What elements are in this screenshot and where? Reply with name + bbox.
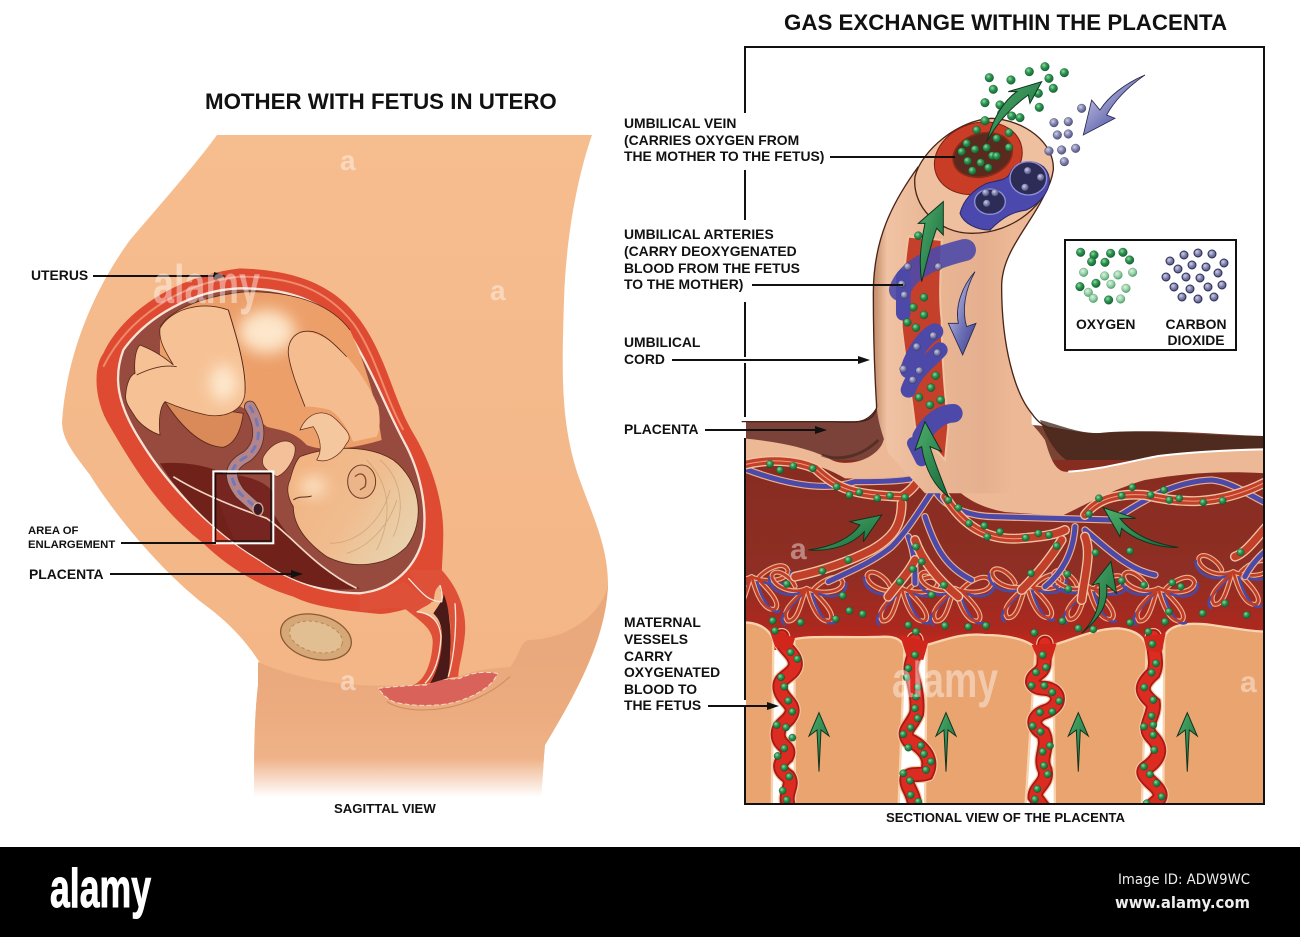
- arrow: curved green left: [808, 515, 882, 550]
- inner white lines: [408, 578, 456, 683]
- watermark letters on panel: a: [790, 533, 807, 566]
- label: umbilical arteries: BLOOD FROM THE FETUS: [624, 260, 800, 276]
- label: maternal vessels: [624, 614, 779, 713]
- labels: right panel: [624, 115, 1125, 825]
- fetus leg and foot: [126, 306, 245, 435]
- lower pelvis outer skin: [254, 585, 608, 797]
- arrows: straight green: [809, 713, 1197, 772]
- cervical wall: [410, 570, 465, 678]
- watermark letters on panel: alamy: [892, 652, 998, 708]
- fetus torso: [160, 292, 382, 449]
- label: uterus: UTERUS: [31, 267, 88, 283]
- umbilical vein cross section: [924, 110, 1033, 207]
- watermark letters on panel: [790, 533, 1257, 708]
- footer url: www.alamy.com: [1115, 893, 1250, 912]
- panel: sagittal view of mother: [62, 135, 608, 797]
- fetus arm: [288, 331, 380, 442]
- maternal spiral vessels: [778, 637, 1160, 810]
- fetal veins (blue): [743, 468, 1267, 587]
- umbilical arteries cross section: [960, 162, 1049, 230]
- label: uterus: [31, 267, 226, 283]
- area of enlargement box: [213, 471, 273, 543]
- title: mother with fetus: MOTHER WITH FETUS IN UTERO: [205, 89, 557, 114]
- label: umbilical vein: THE MOTHER TO THE FETUS): [624, 148, 824, 164]
- legend: oxygen label: OXYGEN: [1076, 316, 1135, 332]
- footer band: [0, 847, 1300, 937]
- dots in cross section: [958, 126, 1044, 207]
- legend: carbon dioxide dots: [1162, 249, 1228, 303]
- vaginal lining: [378, 672, 497, 705]
- umbilical cord: [742, 62, 1145, 497]
- arrow: cord base up: [915, 422, 948, 497]
- lower uterine wall: [359, 582, 442, 685]
- label: umbilical arteries: UMBILICAL ARTERIES: [624, 226, 774, 242]
- label: umbilical cord: [624, 334, 870, 367]
- label: umbilical arteries: (CARRY DEOXYGENATED: [624, 243, 797, 259]
- label: umbilical vein: [624, 115, 955, 164]
- cord end disc: [915, 118, 1053, 233]
- amniotic cavity: [118, 288, 424, 593]
- dots along cord: [898, 232, 945, 409]
- maternal tissue blocks: [742, 623, 1268, 813]
- cord stump: [253, 503, 263, 516]
- label: placenta: PLACENTA: [29, 566, 104, 582]
- uterus: [97, 268, 443, 614]
- fetus hand on face: [300, 413, 349, 461]
- label: maternal vessels: BLOOD TO: [624, 681, 697, 697]
- label: area of enlargement: [28, 525, 216, 551]
- label: maternal vessels: OXYGENATED: [624, 664, 720, 680]
- vessel funnels: [768, 627, 1166, 660]
- bladder: [276, 607, 356, 667]
- legend: oxygen dots: [1076, 248, 1137, 304]
- labels: left panel: [28, 267, 436, 816]
- label: area of enlargement: AREA OF: [28, 525, 79, 537]
- footer image id: Image ID: ADW9WC: [1118, 872, 1250, 888]
- fetal arteries (red): [743, 447, 1267, 600]
- placenta maroon tissue: [743, 460, 1267, 650]
- cord body: [873, 167, 1052, 493]
- label: area of enlargement: ENLARGEMENT: [28, 539, 115, 551]
- legend: carbon dioxide label: DIOXIDE: [1167, 332, 1225, 348]
- fetus head: [288, 448, 418, 565]
- arrow: oxygen leaving: [987, 82, 1042, 142]
- watermark: left panel: a: [340, 665, 356, 696]
- footer logo: alamy: [50, 857, 151, 919]
- umbilical vein in cord: [902, 237, 948, 460]
- oxygen released: [981, 62, 1069, 125]
- caption: sagittal view: SAGITTAL VIEW: [334, 801, 436, 816]
- label: placenta: [29, 566, 303, 582]
- villus tufts: [714, 555, 1273, 625]
- label: umbilical vein: UMBILICAL VEIN: [624, 115, 736, 131]
- peach chorionic membrane: [743, 405, 1267, 516]
- arrow: down the cord: [948, 272, 976, 355]
- label: umbilical cord: CORD: [624, 351, 665, 367]
- label: maternal vessels: CARRY: [624, 648, 674, 664]
- oxygen dots in placenta: [766, 460, 1250, 807]
- watermark: left panel: [153, 145, 506, 696]
- ear: [348, 465, 376, 498]
- watermark: left panel: a: [340, 145, 356, 176]
- label: placenta: [624, 421, 827, 437]
- label: umbilical arteries: [624, 226, 903, 292]
- arrow: carbon dioxide entering: [1083, 75, 1145, 135]
- placenta membrane: [173, 477, 357, 588]
- legend: carbon dioxide label: CARBON: [1166, 316, 1226, 332]
- arrow: curved green center: [1082, 562, 1117, 633]
- arrow: curved green right: [1103, 508, 1178, 547]
- panel: sectional view of placenta: [714, 62, 1273, 813]
- label: umbilical cord: UMBILICAL: [624, 334, 701, 350]
- label: maternal vessels: MATERNAL: [624, 614, 701, 630]
- label: placenta: PLACENTA: [624, 421, 699, 437]
- fetus hand at mouth: [262, 441, 295, 477]
- carbon dioxide entering: [1045, 104, 1086, 166]
- brown placenta surface left: [746, 408, 884, 460]
- umbilical cord small: [232, 407, 258, 510]
- body silhouette: [62, 135, 608, 797]
- watermark: left panel: alamy: [153, 253, 260, 315]
- watermark letters on panel: a: [1240, 666, 1257, 699]
- label: umbilical vein: (CARRIES OXYGEN FROM: [624, 132, 799, 148]
- umbilical arteries in cord: [900, 250, 965, 460]
- caption: sectional view: SECTIONAL VIEW OF THE PLACENTA: [886, 810, 1125, 825]
- title: gas exchange: GAS EXCHANGE WITHIN THE PLACENTA: [784, 10, 1227, 35]
- label: umbilical arteries: TO THE MOTHER): [624, 276, 743, 292]
- legend: [1065, 240, 1236, 350]
- panel frame: [745, 47, 1264, 804]
- uterine wall: [97, 268, 443, 614]
- cervix and vagina: [359, 570, 510, 710]
- fetus lower belly: [165, 402, 243, 447]
- dark upper placenta surface: [1032, 425, 1263, 460]
- label: maternal vessels: VESSELS: [624, 631, 688, 647]
- arrow: up the cord: [918, 202, 943, 282]
- label: maternal vessels: THE FETUS: [624, 697, 701, 713]
- watermark: left panel: a: [490, 275, 506, 306]
- cervical canal: [430, 593, 451, 683]
